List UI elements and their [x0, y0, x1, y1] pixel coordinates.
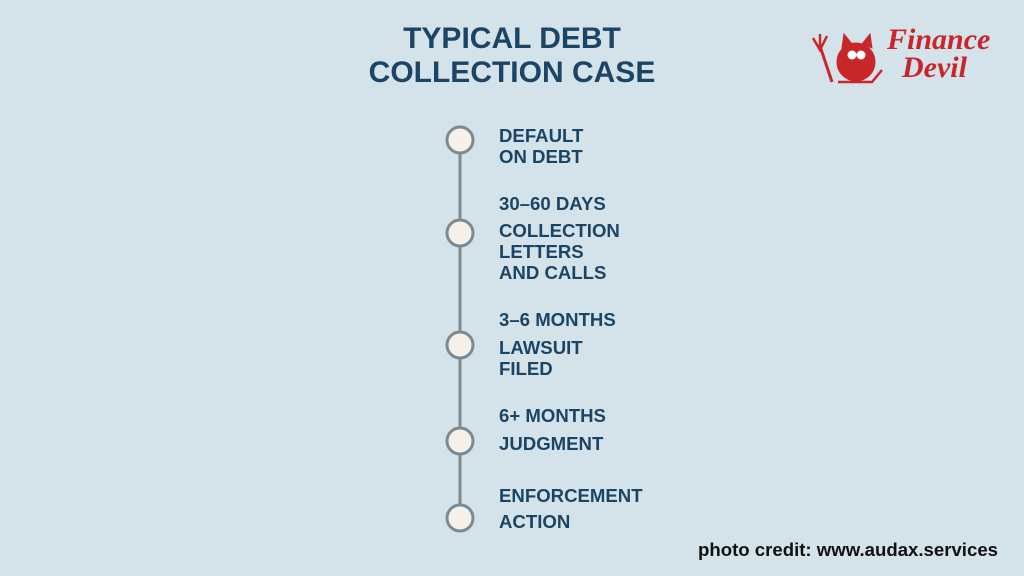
- step 1: ON DEBT: [499, 146, 583, 167]
- logo: Finance Devil: Devil: [902, 51, 967, 84]
- step 2: 30–60 DAYS: [499, 193, 606, 214]
- step 2 text: [499, 220, 620, 283]
- step 5 text: ACTION: [499, 511, 570, 532]
- step 2 text: AND CALLS: [499, 262, 606, 283]
- step 2 text: LETTERS: [499, 241, 584, 262]
- step 4 text: JUDGMENT: [499, 433, 603, 454]
- title: COLLECTION CASE: [369, 56, 655, 89]
- step 5: ENFORCEMENT: [499, 485, 643, 506]
- step 3: 3–6 MONTHS: [499, 309, 616, 330]
- step 1: DEFAULT: [499, 125, 583, 146]
- step 2 text: COLLECTION: [499, 220, 620, 241]
- timeline: [446, 126, 474, 532]
- step 4: 6+ MONTHS: [499, 405, 606, 426]
- logo: Finance Devil: [812, 23, 990, 84]
- icon: devil: [813, 34, 882, 82]
- step 3 text: LAWSUIT: [499, 337, 583, 358]
- step 3 text: FILED: [499, 358, 553, 379]
- step 3 text: [499, 337, 583, 379]
- step 1: [499, 125, 584, 167]
- logo: Finance Devil: Finance: [887, 23, 990, 56]
- title: [369, 22, 655, 89]
- photo credit: photo credit: www.audax.services: [698, 539, 998, 560]
- title: TYPICAL DEBT: [403, 22, 621, 55]
